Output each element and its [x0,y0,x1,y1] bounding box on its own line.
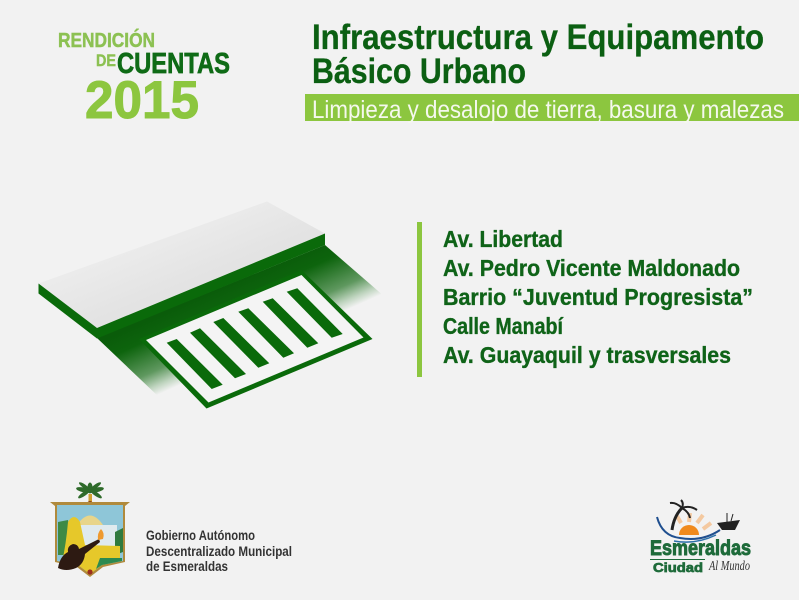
logo: Rendición de Cuentas 2015: 2015 [85,71,199,130]
shield sky [57,505,123,574]
institution name [146,528,292,574]
palm crown [76,481,104,500]
curb top [38,202,325,328]
institution name: de Esmeraldas [146,559,228,574]
logo: Esmeraldas Ciudad Al Mundo: Ciudad [653,560,703,575]
list of streets: Av. Pedro Vicente Maldonado [443,255,740,281]
list of streets: Barrio “Juventud Progresista” [443,284,753,310]
curb front [38,234,325,338]
wave [657,517,720,539]
boat [717,520,740,530]
logo: Esmeraldas Ciudad Al Mundo [650,500,751,575]
sun [679,525,699,535]
list of streets [443,226,753,368]
logo: Esmeraldas Ciudad Al Mundo: Esmeraldas [650,537,751,560]
figure with torch [58,539,100,570]
logo: Rendición de Cuentas 2015: DE [96,51,116,70]
grate interior [146,275,364,402]
list of streets: Av. Guayaquil y trasversales [443,342,731,368]
list of streets: Calle Manabí [443,313,564,339]
title [312,18,764,91]
logo: municipal coat of arms [50,481,130,577]
logo: Rendición de Cuentas 2015 [58,28,230,130]
jungle [58,520,72,555]
grate frame [139,270,372,408]
institution name: Descentralizado Municipal [146,544,292,559]
logo: Esmeraldas Ciudad Al Mundo: Al Mundo [708,559,750,574]
institution name: Gobierno Autónomo [146,528,255,543]
divider bar [417,222,422,377]
logo: Rendición de Cuentas 2015: CUENTAS [117,48,230,80]
title: Básico Urbano [312,52,526,91]
icon: street drain grate with curb [38,202,385,408]
palm [672,508,682,530]
logo: Rendición de Cuentas 2015: RENDICIÓN [58,28,155,52]
grate bars [167,288,343,389]
list of streets: Av. Libertad [443,226,563,252]
curb shadow [97,245,385,398]
golden foliage [62,517,120,574]
shield outline [50,502,130,577]
